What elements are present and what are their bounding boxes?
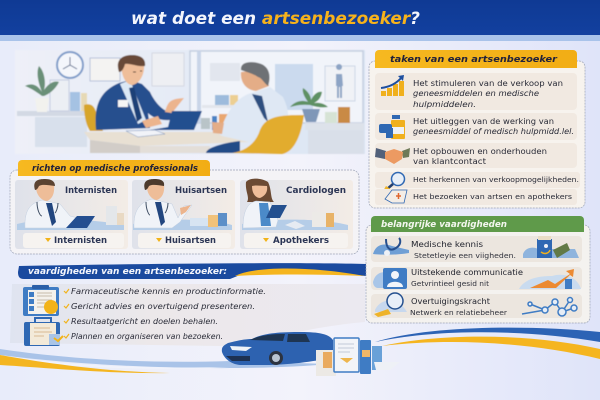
icon: briefcase xyxy=(24,318,63,346)
row: medische kennis xyxy=(371,236,582,262)
panel: richten op medische professionals xyxy=(10,160,359,254)
row: herkennen xyxy=(375,172,580,196)
icon: medicine on desk xyxy=(201,114,230,130)
icon: car xyxy=(222,332,333,365)
icon: consultant xyxy=(96,55,184,130)
icon: window xyxy=(190,51,363,123)
header banner xyxy=(0,0,600,41)
heading: belangrijke vaardigheden xyxy=(371,216,584,232)
icon: magnifier xyxy=(379,172,404,196)
right counter xyxy=(202,95,364,154)
icon: clipboard xyxy=(23,285,59,316)
icon: doctor with tablet xyxy=(243,179,334,229)
heading: richten xyxy=(18,160,210,176)
row: medische kennis: Medische kennis xyxy=(411,240,483,249)
icon: medical kit xyxy=(385,190,407,203)
heading: belangrijke vaardigheden: belangrijke vaardigheden xyxy=(381,220,507,230)
card: cardiologen: Cardiologen xyxy=(286,186,346,196)
icon: doctor xyxy=(206,62,288,153)
row: uitleggen: Het uitleggen van de werking van xyxy=(413,117,554,126)
row: communicatie: Getvrintieel gesid nit xyxy=(411,280,489,288)
list: vaardigheden: Gericht advies en overtuigend presenteren. xyxy=(71,302,255,311)
row: opbouwen: van klantcontact xyxy=(413,157,486,166)
left counter xyxy=(17,80,89,147)
list: vaardigheden: Plannen en organiseren van bezoeken. xyxy=(71,332,223,341)
icon: network xyxy=(522,298,577,316)
heading: taken: taken van een artsenbezoeker xyxy=(390,55,558,65)
row: stimuleren: Het stimuleren van de verkoop van xyxy=(413,79,563,88)
heading: vaardigheden van een artsenbezoeker: vaardigheden van een artsenbezoeker: xyxy=(28,267,227,277)
heading: taken xyxy=(375,50,577,68)
card: internisten: Internisten xyxy=(65,186,117,196)
row: herkennen: Het herkennen van verkoopmogelijkheden. xyxy=(413,176,579,184)
icon: medicine xyxy=(379,115,405,139)
list: vaardigheden: Resultaatgericht en doelen behalen. xyxy=(71,317,218,326)
list: vaardigheden: Farmaceutische kennis en productinformatie. xyxy=(71,287,266,296)
list: vaardigheden xyxy=(64,287,266,341)
icon: growth arrow xyxy=(519,269,581,289)
icon: handshake xyxy=(375,148,410,164)
row: stimuleren: geneesmiddelen en medische xyxy=(413,89,539,98)
box and bottles on right counter xyxy=(325,107,350,123)
row: overtuigingskracht xyxy=(371,293,582,318)
icon: right chair xyxy=(232,115,304,154)
row: opbouwen: Het opbouwen en onderhouden xyxy=(413,147,547,156)
icon: doctor with documents xyxy=(134,179,227,228)
icon: left plant xyxy=(25,66,59,112)
illustration: office consultation xyxy=(15,50,365,154)
label: Apothekers xyxy=(273,236,329,246)
heading: vaardigheden van een artsenbezoeker xyxy=(18,263,366,279)
icon: rising chart xyxy=(381,75,404,96)
icon: medicine box xyxy=(523,236,579,258)
heading: richten: richten op medische professionals xyxy=(32,164,199,174)
icon: doctor with laptop xyxy=(25,179,124,228)
row: overtuigingskracht: Netwerk en relatiebeheer xyxy=(410,309,507,317)
row: bezoeken: Het bezoeken van artsen en apothekers xyxy=(413,193,572,201)
panel: vaardigheden list background xyxy=(10,284,365,346)
row: stimuleren xyxy=(375,73,577,110)
wall chart xyxy=(152,53,184,86)
icon: magnifier and briefcase xyxy=(374,293,407,317)
row: communicatie xyxy=(371,267,582,290)
card: huisartsen xyxy=(132,179,235,249)
icon: person card xyxy=(373,268,407,289)
card: huisartsen: Huisartsen xyxy=(175,186,227,196)
icon: right plant xyxy=(290,88,328,122)
icon: stethoscope xyxy=(373,238,409,256)
decorative swoosh left xyxy=(0,349,330,373)
icon: left chair xyxy=(84,104,103,131)
card: internisten xyxy=(15,179,128,249)
panel: taken van een artsenbezoeker xyxy=(369,50,585,208)
anatomy poster xyxy=(325,64,355,101)
row: uitleggen xyxy=(375,113,577,140)
row: bezoeken xyxy=(375,189,577,205)
icon: medicine stack xyxy=(316,338,400,376)
row: stimuleren: hulpmiddelen. xyxy=(413,100,476,109)
desk xyxy=(84,130,250,153)
decorative swoosh right xyxy=(375,328,600,359)
row: overtuigingskracht: Overtuigingskracht xyxy=(411,297,490,306)
wall poster xyxy=(90,58,120,81)
row: communicatie: Uitstekende communicatie xyxy=(411,268,523,277)
row: medische kennis: Stetetleyie een viigheden. xyxy=(414,252,516,260)
card: cardiologen xyxy=(240,179,353,249)
label: Internisten xyxy=(54,236,107,246)
icon: laptop xyxy=(150,111,202,130)
row: uitleggen: geneesmiddel of medisch hulpmidd.lel. xyxy=(413,127,574,136)
panel: belangrijke vaardigheden xyxy=(366,216,590,323)
title: wat doet een artsenbezoeker? xyxy=(131,9,420,29)
icon: wall clock xyxy=(57,52,83,78)
row: opbouwen xyxy=(375,143,577,168)
label: Huisartsen xyxy=(165,236,216,246)
